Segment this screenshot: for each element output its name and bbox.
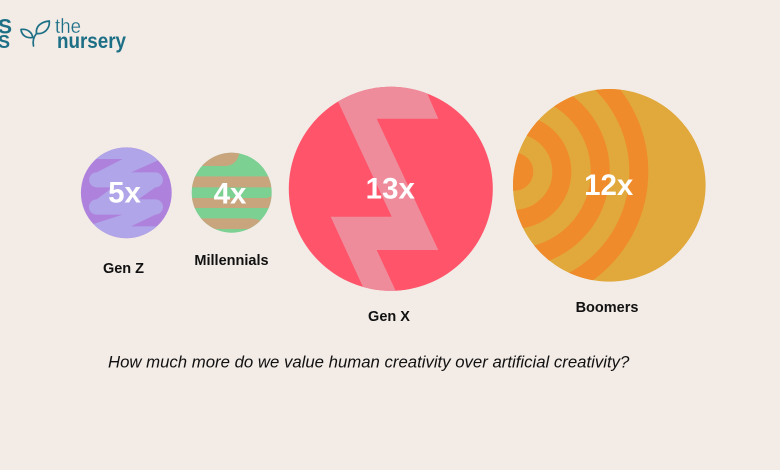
circle: Gen X [288,86,493,291]
lightning bolt pattern [330,86,438,291]
value: 13x [366,172,415,205]
label: Millennials: Millennials [194,253,269,269]
circle: Boomers [513,89,706,282]
caption question: How much more do we value human creativity over artificial creativity? [108,352,630,372]
icon: sprout [21,21,49,46]
value: 4x [214,177,247,210]
label: Boomers: Boomers [576,300,638,316]
wordmark [55,15,126,53]
label: Gen Z: Gen Z [103,261,144,277]
wavy stripe pattern [192,152,272,229]
value: 5x [108,176,141,209]
label: Gen X: Gen X [368,309,410,325]
concentric rings pattern [513,89,648,280]
wordmark: nursery [57,29,126,53]
circle: Gen Z [80,147,172,238]
cropped partner logo letters [0,15,12,52]
zigzag pattern [89,148,163,238]
value: 12x [584,169,634,202]
logo: the nursery [0,15,126,53]
wordmark: the [55,15,81,38]
circle: Millennials [192,152,272,233]
